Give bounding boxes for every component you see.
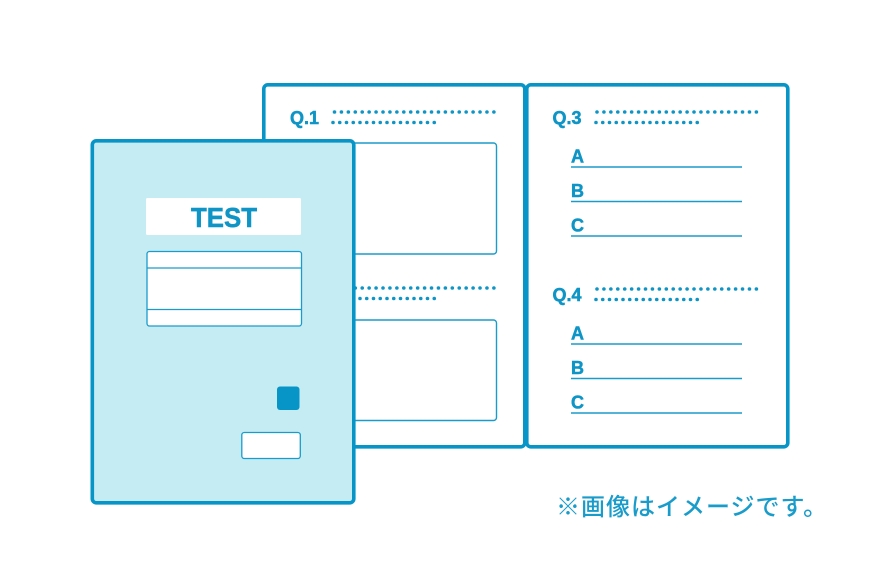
question 3 choices: A xyxy=(571,146,584,166)
name form xyxy=(147,252,302,326)
question 1 answer box xyxy=(340,143,496,254)
question 3 heading: Q.3 xyxy=(552,108,582,128)
booklet front cover xyxy=(92,141,354,503)
small blank box xyxy=(242,432,300,458)
title plate: TEST xyxy=(146,198,301,235)
question 3 choices xyxy=(571,146,742,236)
question 4 heading: Q.4 xyxy=(552,285,582,305)
filled square mark xyxy=(277,386,300,410)
note: image is for illustration: ※画像はイメージです。 xyxy=(556,494,828,521)
question 1 heading: Q.1 xyxy=(290,108,319,128)
title plate: TEST: TEST xyxy=(191,202,257,233)
question 4 choices: A xyxy=(571,324,584,344)
question 2 answer box xyxy=(340,320,496,420)
question 2 heading: Q.2 xyxy=(290,285,319,305)
right booklet page xyxy=(527,85,788,447)
question 4 choices xyxy=(571,324,742,413)
question 3 choices: B xyxy=(571,181,584,201)
left booklet page xyxy=(264,85,525,447)
question 3 choices: C xyxy=(571,216,584,236)
question 4 choices: B xyxy=(571,358,584,378)
question 4 choices: C xyxy=(571,392,584,412)
